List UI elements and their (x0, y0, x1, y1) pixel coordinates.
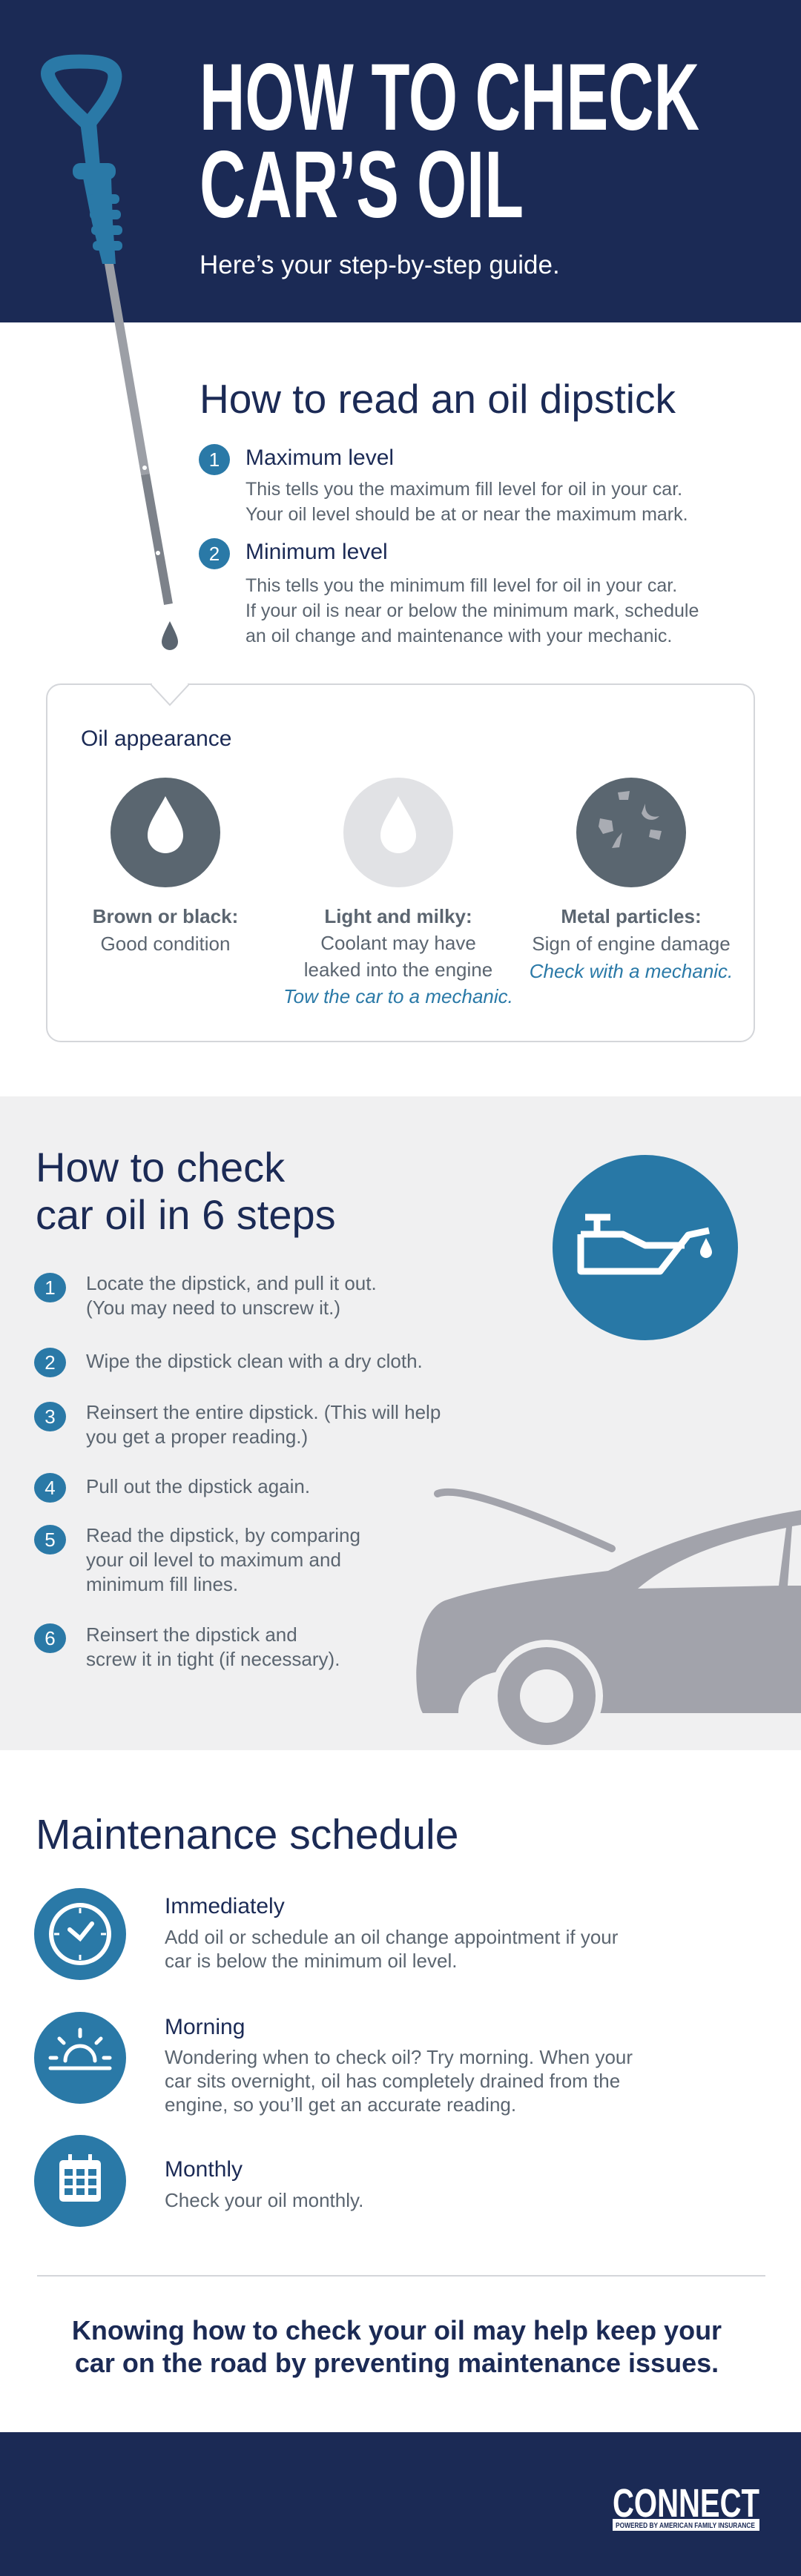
item: maximum level (199, 444, 688, 525)
label: light and milky: Coolant may have (320, 932, 476, 954)
heading: 6 steps (36, 1144, 336, 1238)
schedule: morning: Morning (165, 2015, 245, 2039)
heading: maintenance schedule: Maintenance schedule (36, 1811, 458, 1858)
icon: milky drop (343, 778, 453, 887)
step 2: 2 (44, 1351, 56, 1374)
step 6: Reinsert the dipstick and (86, 1623, 297, 1646)
step 5: minimum fill lines. (86, 1573, 238, 1595)
step 1: Locate the dipstick, and pull it out. (86, 1272, 377, 1294)
schedule: morning: Wondering when to check oil? Try morning. When your (165, 2046, 633, 2068)
step 4 (34, 1473, 310, 1503)
step 3: you get a proper reading.) (86, 1426, 308, 1448)
icon: clock (34, 1888, 126, 1980)
schedule: monthly (34, 2135, 363, 2227)
step 1: 1 (44, 1277, 56, 1299)
closing statement: car on the road by preventing maintenance issues. (75, 2348, 719, 2378)
schedule: immediately: Immediately (165, 1894, 285, 1918)
footer (0, 2432, 801, 2576)
icon: calendar (34, 2135, 126, 2227)
step 6 (34, 1623, 340, 1670)
label: metal particles: Metal particles: (561, 905, 702, 927)
icon: dark drop (111, 778, 220, 887)
step 6: screw it in tight (if necessary). (86, 1648, 340, 1670)
step 5 (34, 1524, 360, 1595)
icon: sunrise (34, 2012, 126, 2104)
step 3 (34, 1401, 441, 1448)
item: minimum level (199, 538, 699, 646)
item: maximum level: Maximum level (245, 446, 394, 470)
closing statement (72, 2315, 722, 2378)
schedule: immediately: Add oil or schedule an oil change appointment if your (165, 1926, 618, 1948)
step 1 (34, 1272, 377, 1319)
subtitle: Here’s your step-by-step guide. (200, 251, 560, 279)
heading: oil appearance: Oil appearance (81, 726, 231, 751)
step 4: 4 (44, 1477, 56, 1499)
item: minimum level: If your oil is near or below the minimum mark, schedule (245, 600, 699, 621)
item: minimum level: an oil change and maintenance with your mechanic. (245, 626, 672, 646)
icon: car with open hood (416, 1489, 801, 1745)
label: light and milky (283, 905, 513, 1007)
step 2 (34, 1348, 423, 1377)
schedule: morning (34, 2012, 633, 2116)
item: minimum level: Minimum level (245, 540, 388, 564)
schedule: immediately (34, 1888, 618, 1980)
label: brown or black: Good condition (101, 933, 230, 955)
schedule: monthly: Check your oil monthly. (165, 2189, 363, 2211)
schedule: monthly: Monthly (165, 2157, 243, 2182)
item: maximum level: 1 (209, 448, 220, 471)
item: minimum level: 2 (209, 543, 220, 565)
item: maximum level: Your oil level should be at or near the maximum mark. (245, 504, 688, 525)
step 6: 6 (44, 1627, 56, 1649)
header band (0, 0, 801, 322)
item: minimum level: This tells you the minimum fill level for oil in your car. (245, 575, 677, 596)
title: CAR’S OIL (200, 132, 524, 238)
schedule: morning: engine, so you’ll get an accurate reading. (165, 2093, 516, 2116)
closing statement: Knowing how to check your oil may help keep your (72, 2315, 722, 2345)
label: brown or black (93, 905, 238, 955)
step 5: Read the dipstick, by comparing (86, 1524, 360, 1546)
icon: oil can (553, 1155, 738, 1340)
step 1: (You may need to unscrew it.) (86, 1297, 340, 1319)
icon: metal particles (576, 778, 686, 887)
label: light and milky: leaked into the engine (304, 958, 492, 981)
title (200, 44, 699, 238)
notch (151, 683, 189, 706)
label: light and milky: Light and milky: (324, 905, 472, 927)
icon: dipstick (41, 55, 178, 650)
step 4: Pull out the dipstick again. (86, 1475, 310, 1497)
heading: 6 steps: How to check (36, 1144, 285, 1191)
heading: how to read: How to read an oil dipstick (200, 376, 676, 422)
step 2: Wipe the dipstick clean with a dry cloth. (86, 1350, 423, 1372)
schedule: immediately: car is below the minimum oil level. (165, 1950, 457, 1972)
step 5: your oil level to maximum and (86, 1549, 341, 1571)
heading: 6 steps: car oil in 6 steps (36, 1191, 336, 1238)
label: metal particles (530, 905, 733, 982)
label: metal particles: Sign of engine damage (532, 933, 731, 955)
label: brown or black: Brown or black: (93, 905, 238, 927)
step 3: 3 (44, 1405, 56, 1428)
schedule: morning: car sits overnight, oil has completely drained from the (165, 2070, 620, 2092)
panel: 6 steps (0, 1096, 801, 1750)
step 5: 5 (44, 1529, 56, 1551)
step 3: Reinsert the entire dipstick. (This will help (86, 1401, 441, 1423)
label: metal particles: Check with a mechanic. (530, 960, 733, 982)
panel: oil appearance (46, 683, 755, 1042)
item: maximum level: This tells you the maximum fill level for oil in your car. (245, 479, 682, 500)
label: light and milky: Tow the car to a mechanic. (283, 985, 513, 1007)
